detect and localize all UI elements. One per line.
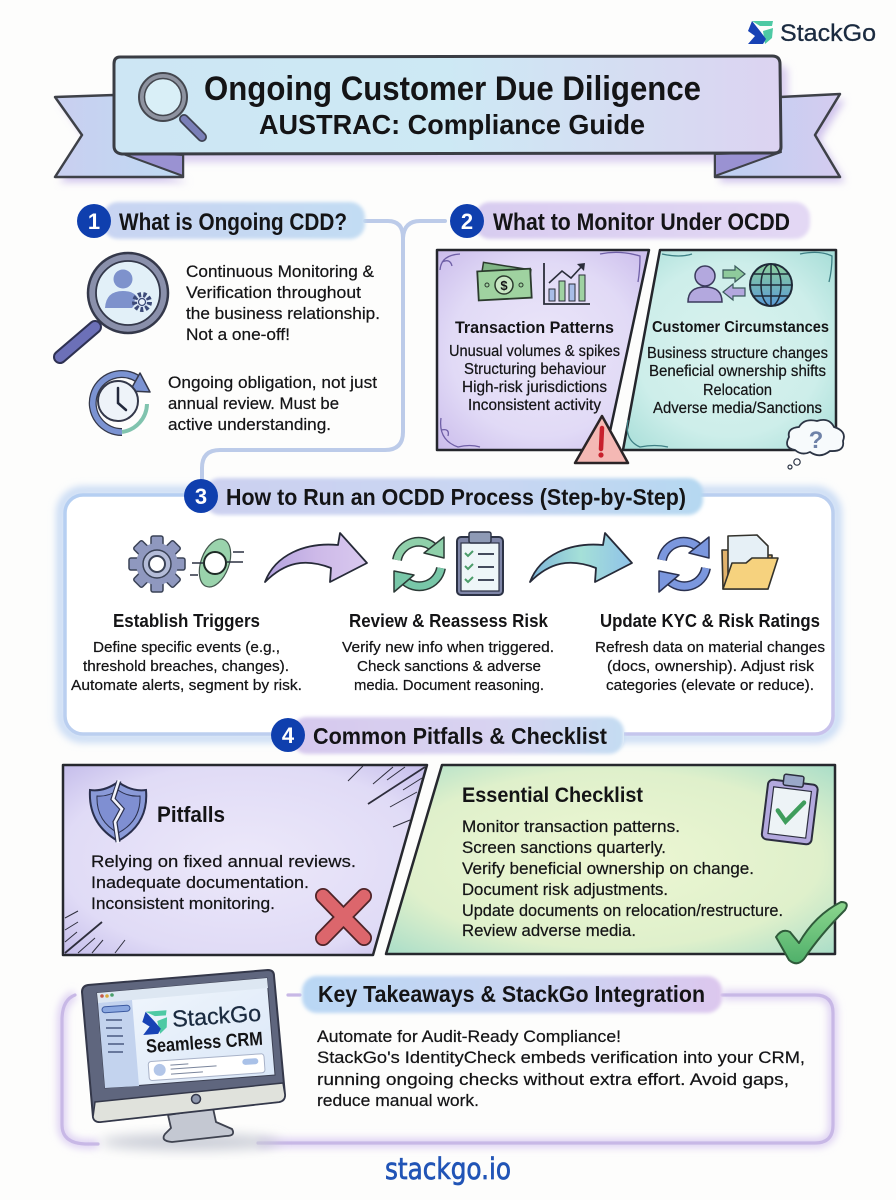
icon: refresh blue <box>659 537 709 592</box>
icon: cash notes <box>477 262 532 300</box>
icon: desktop monitor with CRM <box>82 970 285 1150</box>
heading: pitfalls: Pitfalls <box>157 802 225 827</box>
text: ongoing obligation <box>168 373 377 434</box>
heading: section 3: How to Run an OCDD Process (Step-by-Step) <box>226 484 686 510</box>
title text: AUSTRAC: Compliance Guide <box>259 109 645 140</box>
heading: essential checklist: Essential Checklist <box>462 784 643 807</box>
list: checklist items: Review adverse media. <box>462 921 636 940</box>
icon: magnifier with person and gear <box>60 253 168 357</box>
list: pitfalls: Relying on fixed annual reviews. <box>91 852 356 871</box>
icon: red cross <box>323 896 364 938</box>
list: pitfalls <box>91 852 356 913</box>
heading: section 2: 2 <box>461 209 473 234</box>
heading: section 2 <box>450 202 810 239</box>
list: checklist items: Verify beneficial ownership on change. <box>462 859 754 878</box>
heading: section 4 <box>271 717 624 754</box>
text: integration summary: Automate for Audit-Ready Compliance! <box>317 1027 621 1046</box>
screen logo and text: StackGo <box>171 1000 262 1032</box>
list: transaction patterns: Structuring behaviour <box>464 361 606 378</box>
arrow: step 1 to step 2 <box>265 533 367 582</box>
connector lines between sections <box>202 221 445 482</box>
title text: Ongoing Customer Due Diligence <box>204 70 701 108</box>
list: checklist items <box>462 817 783 940</box>
icon: clipboard check <box>761 772 819 845</box>
list: checklist items: Document risk adjustments. <box>462 880 668 899</box>
heading: section 1: What is Ongoing CDD? <box>119 209 347 236</box>
icon: cash notes: $ <box>500 278 508 293</box>
screen logo and text <box>141 1000 265 1081</box>
text: integration summary: reduce manual work. <box>317 1091 479 1110</box>
text: continuous monitoring: Continuous Monitoring & <box>186 262 375 281</box>
icon: question cloud <box>787 420 844 469</box>
text: integration summary: StackGo's IdentityCheck embeds verification into your CRM, <box>317 1048 805 1067</box>
text: ongoing obligation: active understanding. <box>168 415 331 434</box>
text: integration summary: running ongoing checks without extra effort. Avoid gaps, <box>317 1070 789 1089</box>
list: checklist items: Update documents on relocation/restructure. <box>462 901 783 920</box>
list: customer circumstances: Beneficial ownership shifts <box>649 363 826 380</box>
list: pitfalls: Inadequate documentation. <box>91 873 309 892</box>
icon: broken shield <box>90 780 146 843</box>
step: establish triggers: threshold breaches, changes). <box>83 659 289 675</box>
heading: section 3 <box>184 478 703 515</box>
monitor body <box>82 970 285 1122</box>
logo: StackGo: StackGo <box>780 20 876 47</box>
step: review and reassess risk: Check sanctions & adverse <box>357 659 541 675</box>
monitor stand <box>164 1108 233 1142</box>
left ribbon tail <box>55 95 183 177</box>
list: checklist items: Monitor transaction patterns. <box>462 817 680 836</box>
list: customer circumstances: Relocation <box>703 382 772 399</box>
list: customer circumstances <box>647 345 828 417</box>
heading: key takeaways <box>302 976 722 1013</box>
heading: section 4: 4 <box>282 723 295 748</box>
icon: exchange arrows <box>723 266 745 300</box>
step: establish triggers: Automate alerts, segment by risk. <box>71 678 302 694</box>
list: checklist items: Screen sanctions quarterly. <box>462 838 666 857</box>
heading: section 1 <box>77 202 365 239</box>
step: update KYC and risk ratings <box>595 611 825 694</box>
heading: section 4: Common Pitfalls & Checklist <box>313 723 607 749</box>
list: transaction patterns <box>449 343 620 414</box>
text: ongoing obligation: annual review. Must be <box>168 394 339 413</box>
icon: clock with circular arrow <box>93 373 150 432</box>
icon: gears <box>129 535 244 592</box>
text: integration summary <box>317 1027 805 1110</box>
list: pitfalls: Inconsistent monitoring. <box>91 894 275 913</box>
icon: person <box>688 266 722 302</box>
icon: globe <box>750 264 792 306</box>
monitor screen <box>97 978 275 1088</box>
footer: website url: stackgo.io <box>385 1152 511 1186</box>
text: continuous monitoring: Verification throughout <box>186 283 361 302</box>
step: establish triggers: Define specific events (e.g., <box>93 640 280 656</box>
text: continuous monitoring: Not a one-off! <box>186 325 290 344</box>
step: update KYC and risk ratings: categories (elevate or reduce). <box>606 678 814 694</box>
heading: section 3: 3 <box>195 484 207 509</box>
step: update KYC and risk ratings: Update KYC & Risk Ratings <box>600 611 820 631</box>
icon: refresh green <box>394 537 444 592</box>
step: establish triggers: Establish Triggers <box>113 611 260 631</box>
panel: customer circumstances <box>623 250 836 450</box>
title ribbon banner <box>55 56 845 182</box>
icon: question cloud: ? <box>809 427 823 454</box>
list: customer circumstances: Business structure changes <box>647 345 828 362</box>
list: customer circumstances: Adverse media/Sanctions <box>653 400 822 417</box>
right ribbon tail <box>715 94 840 177</box>
step: update KYC and risk ratings: (docs, ownership). Adjust risk <box>607 659 815 675</box>
icon: big green check <box>776 902 847 963</box>
screen sidebar <box>98 1000 139 1088</box>
title text <box>204 70 701 140</box>
screen logo and text: Seamless CRM <box>145 1029 264 1058</box>
heading: key takeaways: Key Takeaways & StackGo Integration <box>318 981 705 1007</box>
icon: checklist clipboard <box>457 532 503 595</box>
list: transaction patterns: High-risk jurisdictions <box>462 379 607 396</box>
heading: transaction patterns: Transaction Patterns <box>455 318 614 337</box>
panel: what is ongoing CDD <box>60 253 380 434</box>
step: review and reassess risk: Review & Reassess Risk <box>349 611 549 631</box>
icon: rising bar chart <box>544 263 590 304</box>
panel: transaction patterns <box>437 250 649 450</box>
text: ongoing obligation: Ongoing obligation, not just <box>168 373 377 392</box>
icon: folder with documents <box>722 535 778 589</box>
panel: OCDD process <box>61 478 837 738</box>
arrow: step 2 to step 3 <box>530 533 632 582</box>
step: review and reassess risk <box>342 611 554 694</box>
heading: section 1: 1 <box>88 209 100 234</box>
list: transaction patterns: Unusual volumes & spikes <box>449 343 620 360</box>
panel: essential checklist <box>386 765 847 963</box>
step: review and reassess risk: Verify new info when triggered. <box>342 640 554 656</box>
step: update KYC and risk ratings: Refresh data on material changes <box>595 640 825 656</box>
list: transaction patterns: Inconsistent activity <box>468 397 601 414</box>
ribbon centre <box>114 56 781 154</box>
icon: magnifying glass <box>139 73 202 137</box>
heading: section 2: What to Monitor Under OCDD <box>493 209 790 236</box>
panel: key takeaways <box>62 976 833 1144</box>
step: review and reassess risk: media. Document reasoning. <box>354 678 544 694</box>
step: establish triggers <box>71 611 302 694</box>
text: continuous monitoring <box>186 262 380 344</box>
heading: customer circumstances: Customer Circumstances <box>652 319 829 336</box>
icon: warning triangle <box>575 416 628 463</box>
text: continuous monitoring: the business relationship. <box>186 304 380 323</box>
panel: pitfalls <box>63 765 427 955</box>
